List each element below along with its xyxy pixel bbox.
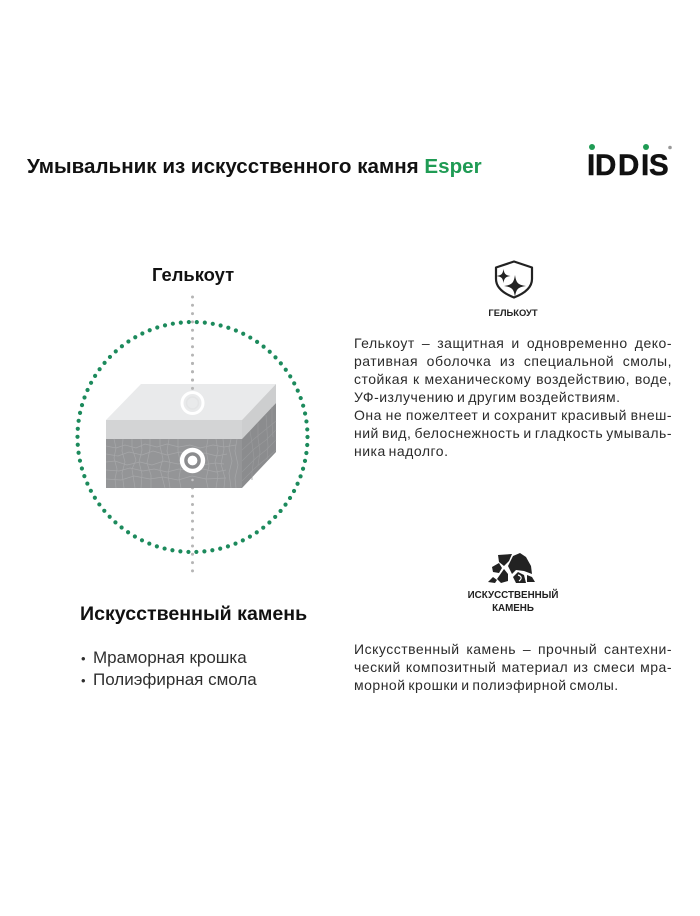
marker: gelcoat layer xyxy=(182,392,203,414)
text block: gelcoat description: Она не пожелтеет и сохранит красивый внеш- xyxy=(354,407,672,423)
bullet list: Мраморная крошка xyxy=(93,648,247,667)
text block: gelcoat description: ний вид, белоснежность и гладкость умываль- xyxy=(354,425,672,441)
text block: gelcoat description: стойкая к механическому воздействию, воде, xyxy=(354,371,672,387)
text block: gelcoat description xyxy=(354,335,672,459)
bullet list xyxy=(81,648,257,688)
text block: gelcoat description: УФ-излучению и другим воздействиям. xyxy=(354,389,621,405)
layered block xyxy=(106,384,276,488)
icon: stones xyxy=(488,553,535,583)
icon label: artificial stone xyxy=(468,588,558,614)
dotted line over block xyxy=(191,364,194,488)
icon label: artificial stone: ИСКУССТВЕННЫЙ xyxy=(468,590,558,601)
heading: gelcoat: Гелькоут xyxy=(152,264,234,285)
bullet list: • xyxy=(81,651,86,666)
icon label: gelcoat: ГЕЛЬКОУТ xyxy=(488,307,538,318)
bullet list: • xyxy=(81,672,86,688)
text block: stone description: ческий композитный материал из смеси мра- xyxy=(354,659,672,675)
heading: artificial stone: Искусственный камень xyxy=(80,603,307,625)
text block: gelcoat description: ника надолго. xyxy=(354,443,448,459)
dotted vertical line xyxy=(191,297,194,572)
bullet list: Полиэфирная смола xyxy=(93,670,257,688)
text block: stone description: Искусственный камень – прочный сантехни- xyxy=(354,641,672,657)
dotted circle xyxy=(78,322,308,552)
icon label: artificial stone: КАМЕНЬ xyxy=(492,603,534,614)
text block: stone description xyxy=(354,641,672,693)
layer diagram xyxy=(75,296,310,572)
title: Умывальник из искусственного камня Esper xyxy=(27,155,482,178)
text block: gelcoat description: ративная оболочка из специальной смолы, xyxy=(354,353,672,369)
text block: stone description: морной крошки и полиэфирной смолы. xyxy=(354,677,619,693)
icon: gelcoat shield xyxy=(494,260,534,299)
marker: stone layer xyxy=(180,448,205,473)
text block: gelcoat description: Гелькоут – защитная и одновременно деко- xyxy=(354,335,672,351)
